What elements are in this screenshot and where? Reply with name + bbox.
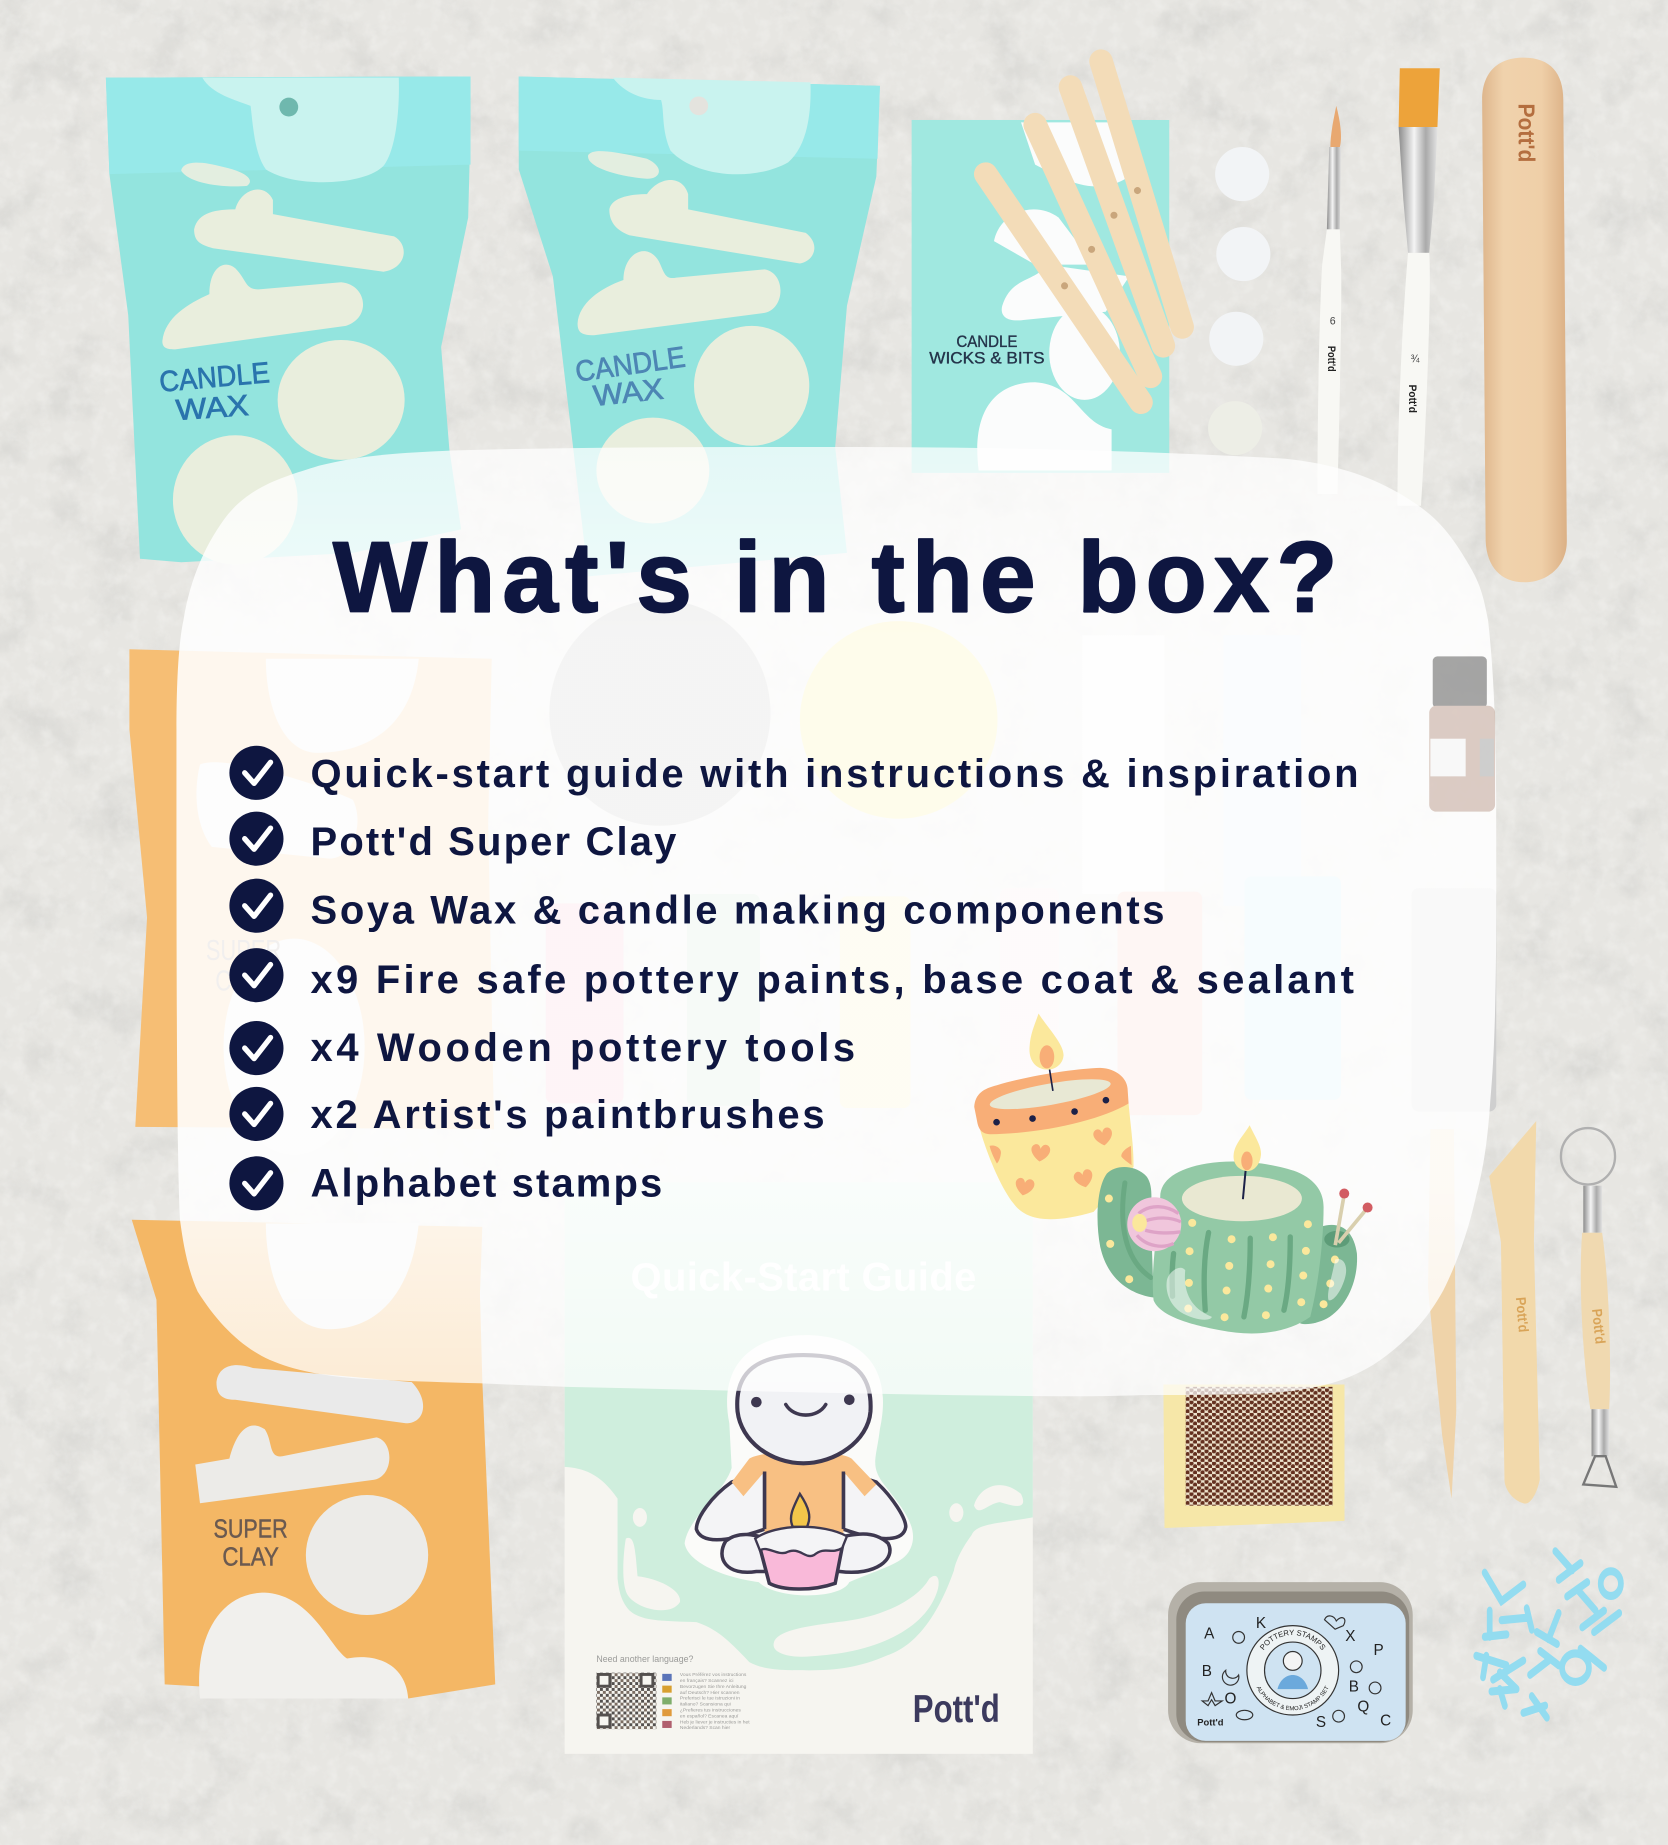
pott'd logo: Pott'd bbox=[913, 1688, 1000, 1731]
photo: paintbrushes: Pott'd bbox=[1406, 385, 1418, 413]
photo: candle wax bag 1 bbox=[106, 76, 471, 565]
language help text: Vous Préférez vos instructions bbox=[680, 1672, 747, 1678]
brush markings: 6 bbox=[1330, 316, 1336, 328]
language help text: en français? Scannez ici bbox=[680, 1678, 733, 1684]
language help text: ¿Prefieres tus instrucciones bbox=[680, 1707, 741, 1713]
item: paints: x9 Fire safe pottery paints, base coat & sealant bbox=[311, 958, 1354, 1002]
tool: loop trimmer bbox=[1561, 1128, 1616, 1487]
tool: loop trimmer: Pott'd bbox=[1589, 1308, 1609, 1345]
tin lettering: A bbox=[1204, 1626, 1215, 1643]
photo: quick-start guide booklet bbox=[565, 1182, 1033, 1754]
photo: super clay bag 2: CLAY bbox=[222, 1544, 279, 1572]
translucent white panel bbox=[176, 447, 1496, 1396]
photo: match striker sheet bbox=[1163, 1384, 1345, 1528]
icon: heart candle bbox=[974, 1014, 1134, 1219]
tin lettering: Q bbox=[1357, 1698, 1369, 1715]
tin lettering: B bbox=[1349, 1678, 1359, 1695]
photo: paint pots bbox=[549, 600, 1301, 906]
tool: pointed modelling stick bbox=[1428, 1129, 1456, 1499]
item: alphabet stamps: Alphabet stamps bbox=[311, 1161, 662, 1205]
item: wooden tools: x4 Wooden pottery tools bbox=[311, 1026, 855, 1070]
language help text: Need another language? bbox=[596, 1654, 694, 1664]
guide title: Quick-Start Guide bbox=[631, 1255, 976, 1299]
item: super clay bbox=[229, 812, 677, 866]
mascot sticker bbox=[685, 1335, 913, 1595]
bag label: super clay: SUPER bbox=[214, 1515, 288, 1543]
tin lettering bbox=[1197, 1615, 1391, 1731]
photo: wooden rolling pin: Pott'd bbox=[1514, 104, 1540, 162]
tin lettering: Pott'd bbox=[1197, 1717, 1224, 1728]
tin lettering: C bbox=[1380, 1713, 1391, 1730]
photo: super clay bag 2 bbox=[132, 1220, 495, 1699]
language help text: en español? Escanea aquí bbox=[680, 1713, 739, 1719]
bag label: candle wax: CANDLE bbox=[573, 341, 687, 389]
photo: paintbrushes: Pott'd bbox=[1325, 346, 1337, 372]
language help text: auf Deutsch? Hier scannen bbox=[680, 1690, 740, 1696]
photo: super clay bag 1: CLAY bbox=[215, 964, 272, 996]
tin lettering: S bbox=[1316, 1714, 1326, 1731]
tin lettering: O bbox=[1224, 1690, 1236, 1707]
item: super clay: Pott'd Super Clay bbox=[311, 820, 677, 864]
qr code bbox=[596, 1673, 656, 1729]
bag label: super clay: SUPER bbox=[206, 934, 281, 966]
tin lettering: P bbox=[1374, 1642, 1384, 1659]
tin lettering: K bbox=[1256, 1615, 1267, 1632]
icon: cactus candle bbox=[1098, 1125, 1373, 1333]
item: quick-start guide: Quick-start guide with instructions & inspiration bbox=[311, 752, 1359, 796]
photo: candle wicks and bits card bbox=[912, 61, 1182, 473]
item: soya wax: Soya Wax & candle making components bbox=[311, 888, 1165, 932]
photo: paintbrushes: ¾ bbox=[1411, 353, 1420, 365]
language help text bbox=[596, 1654, 750, 1731]
tin lettering: B bbox=[1202, 1663, 1212, 1680]
card label: CANDLE bbox=[956, 333, 1018, 351]
illustration: candles bbox=[974, 1014, 1373, 1333]
item: alphabet stamps bbox=[229, 1156, 662, 1210]
tool: wooden rib knife bbox=[1489, 1121, 1540, 1504]
photo: candle wax bag 2 bbox=[519, 76, 880, 576]
bag label: candle wax: CANDLE bbox=[158, 356, 271, 399]
photo: candle wicks and bits card: WICKS & BITS bbox=[929, 349, 1045, 367]
photo: wooden tools: Pott'd bbox=[1513, 1296, 1532, 1333]
language help text: Bevorzugen Sie Ihre Anleitung bbox=[680, 1684, 747, 1690]
language help text: Heb je liever je instructies in het bbox=[680, 1719, 750, 1725]
photo: super clay bag 1 bbox=[129, 649, 494, 1155]
photo: white sticker circles bbox=[1208, 147, 1270, 455]
language help text: Preferisci le tue istruzioni in bbox=[680, 1696, 740, 1702]
checklist bbox=[229, 746, 1359, 1210]
tin lettering: POTTERY STAMPS bbox=[1260, 1630, 1326, 1650]
photo: paintbrushes bbox=[1317, 68, 1440, 506]
language help text: italiano? Scansiona qui bbox=[680, 1702, 731, 1708]
photo: wooden tools bbox=[1428, 1121, 1616, 1504]
photo: loose blue alphabet stamps bbox=[1476, 1551, 1621, 1718]
tin lettering: ALPHABET & EMOJI STAMP SET bbox=[1256, 1686, 1328, 1710]
title: What's in the box? bbox=[333, 522, 1337, 634]
tin lettering: X bbox=[1345, 1628, 1355, 1645]
photo: pottery stamps tin bbox=[1168, 1582, 1413, 1744]
wooden wick sticks bbox=[986, 61, 1182, 402]
item: paintbrushes: x2 Artist's paintbrushes bbox=[311, 1093, 825, 1137]
photo: candle wax bag 2: WAX bbox=[592, 373, 665, 413]
language help text: Nederlands? Scan hier bbox=[680, 1725, 730, 1731]
photo: bottle seen through panel bbox=[1429, 656, 1495, 812]
photo: paint tubes bbox=[546, 876, 1496, 1115]
photo: candle wax bag 1: WAX bbox=[175, 389, 250, 427]
photo: wooden rolling pin bbox=[1482, 58, 1567, 582]
